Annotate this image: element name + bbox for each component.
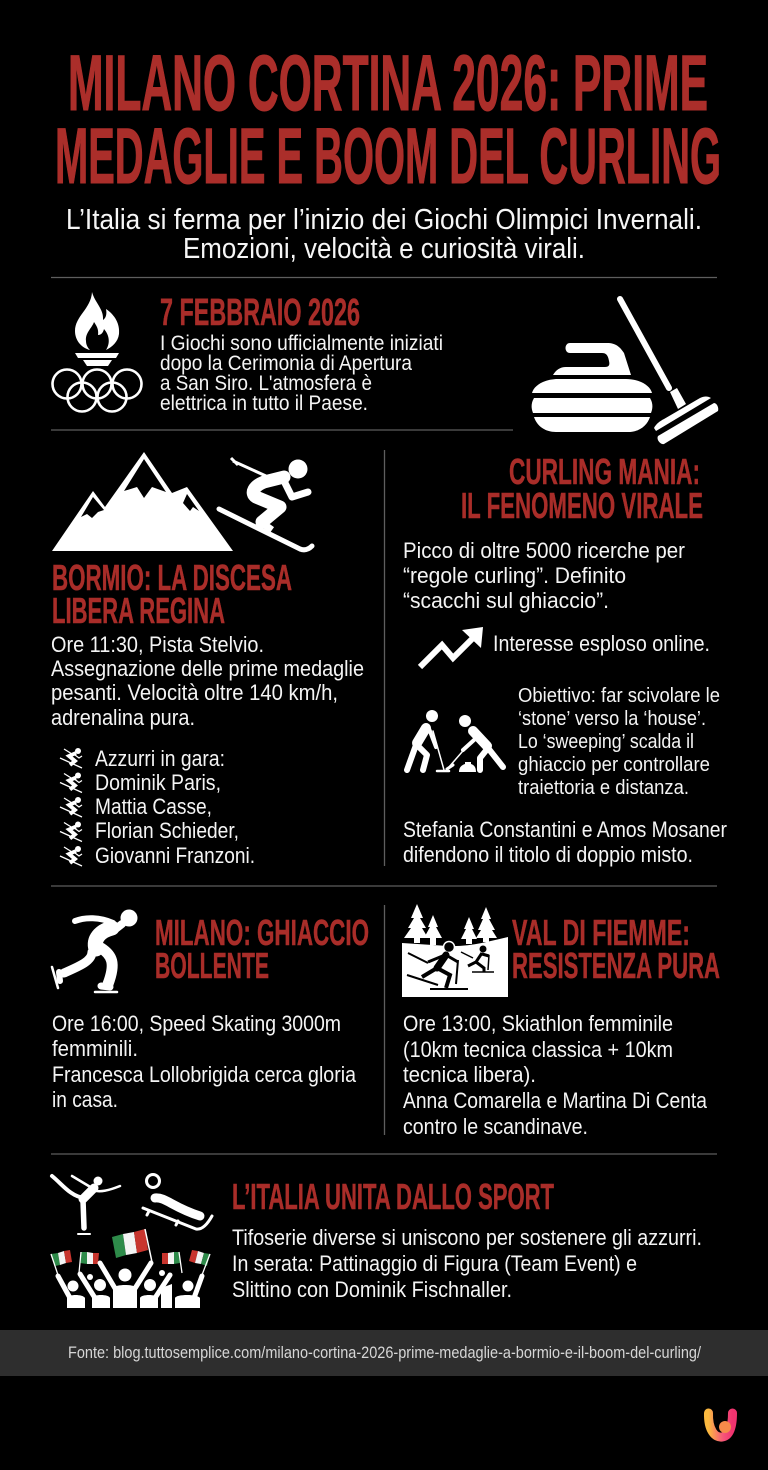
text: opening ceremony: dopo la Cerimonia di Apertura xyxy=(160,352,412,375)
icon: downhill skier xyxy=(219,458,312,550)
icon: cheering crowd with flags xyxy=(51,1229,210,1308)
text: azzurri list: Azzurri in gara: xyxy=(95,746,225,771)
icon: brand logo xyxy=(708,1413,732,1437)
heading: date: 7 FEBBRAIO 2026 xyxy=(160,292,360,334)
panel: milano xyxy=(52,910,369,1112)
icon: figure skater xyxy=(52,1176,120,1234)
text: italia unita details xyxy=(232,1225,702,1302)
icon: cross-country skiers xyxy=(402,904,508,997)
text: online interest: Interesse esploso online. xyxy=(493,631,710,656)
text: italia unita details: In serata: Pattinaggio di Figura (Team Event) e xyxy=(232,1251,637,1276)
subtitle xyxy=(66,204,702,265)
icon: luge xyxy=(143,1174,212,1229)
text: searches: “regole curling”. Definito xyxy=(403,563,626,588)
icon: curling sweepers xyxy=(407,710,503,772)
text: skiathlon details: Anna Comarella e Martina Di Centa xyxy=(403,1088,708,1113)
text: objective: Lo ‘sweeping’ scalda il xyxy=(518,731,694,753)
text: objective xyxy=(518,685,720,799)
text: italia unita details: Tifoserie diverse si uniscono per sostenere gli azzurri. xyxy=(232,1225,702,1250)
icon: people xyxy=(58,1263,202,1308)
text: bormio details xyxy=(51,632,364,730)
text: milano details: Ore 16:00, Speed Skating 3000m xyxy=(52,1011,341,1036)
text: azzurri list: Dominik Paris, xyxy=(95,770,221,795)
text: athletes: difendono il titolo di doppio misto. xyxy=(403,842,693,867)
text: milano details: Francesca Lollobrigida cerca gloria xyxy=(52,1062,357,1087)
panel: val di fiemme xyxy=(402,904,720,1139)
text: azzurri list: Mattia Casse, xyxy=(95,794,212,819)
icon: speed skater xyxy=(52,910,138,992)
title xyxy=(55,38,721,200)
text: milano details: femminili. xyxy=(52,1036,138,1061)
icon: olympic torch and rings xyxy=(52,292,142,412)
panel: curling mania xyxy=(403,451,727,867)
heading: bormio: BORMIO: LA DISCESA xyxy=(52,557,292,598)
panel: bormio xyxy=(51,557,364,868)
heading: milano: BOLLENTE xyxy=(155,945,269,986)
text: athletes: Stefania Constantini e Amos Mosaner xyxy=(403,817,727,842)
icon: mountains xyxy=(52,452,233,551)
heading: val di fiemme xyxy=(512,912,720,986)
text: searches: “scacchi sul ghiaccio”. xyxy=(403,588,609,613)
heading: bormio xyxy=(52,557,292,631)
text: athletes xyxy=(403,817,727,867)
text: italia unita details: Slittino con Dominik Fischnaller. xyxy=(232,1277,512,1302)
text: searches: Picco di oltre 5000 ricerche per xyxy=(403,538,685,563)
text: milano details: in casa. xyxy=(52,1087,118,1112)
icon: rising arrow xyxy=(420,627,483,667)
text: skiathlon details xyxy=(403,1011,708,1139)
icon: curling stone and broom xyxy=(532,299,718,444)
subtitle: L’Italia si ferma per l’inizio dei Giochi Olimpici Invernali. xyxy=(66,204,702,236)
text: skiathlon details: Ore 13:00, Skiathlon femminile xyxy=(403,1011,673,1036)
heading: bormio: LIBERA REGINA xyxy=(52,590,225,631)
subtitle: Emozioni, velocità e curiosità virali. xyxy=(183,233,585,265)
text: bormio details: Assegnazione delle prime medaglie xyxy=(51,656,364,681)
icon: small flags xyxy=(51,1250,210,1275)
text: opening ceremony: I Giochi sono ufficialmente iniziati xyxy=(160,332,443,355)
text: skiathlon details: tecnica libera). xyxy=(403,1062,536,1087)
text: azzurri list: Florian Schieder, xyxy=(95,818,239,843)
text: objective: ‘stone’ verso la ‘house’. xyxy=(518,708,706,730)
text: objective: Obiettivo: far scivolare le xyxy=(518,685,720,707)
text: azzurri list xyxy=(95,746,255,868)
text: objective: ghiaccio per controllare xyxy=(518,754,710,776)
icon: large italian flag xyxy=(112,1229,152,1262)
heading: milano xyxy=(155,912,369,986)
footer source band xyxy=(0,1330,768,1376)
text: objective: traiettoria e distanza. xyxy=(518,777,689,799)
text: skiathlon details: (10km tecnica classica + 10km xyxy=(403,1037,673,1062)
text: bormio details: Ore 11:30, Pista Stelvio. xyxy=(51,632,264,657)
text: opening ceremony xyxy=(160,332,443,415)
text: bormio details: adrenalina pura. xyxy=(51,705,195,730)
text: milano details xyxy=(52,1011,357,1112)
text: opening ceremony: a San Siro. L'atmosfera è xyxy=(160,372,372,395)
icon list: small skiers xyxy=(60,748,82,866)
panel: 7 febbraio xyxy=(160,292,443,415)
text: bormio details: pesanti. Velocità oltre 140 km/h, xyxy=(51,680,338,705)
heading: milano: MILANO: GHIACCIO xyxy=(155,912,369,953)
text: searches xyxy=(403,538,685,613)
heading: italia unita: L’ITALIA UNITA DALLO SPORT xyxy=(232,1176,554,1217)
text: opening ceremony: elettrica in tutto il Paese. xyxy=(160,392,368,415)
heading: curling mania xyxy=(461,451,703,526)
text: azzurri list: Giovanni Franzoni. xyxy=(95,843,255,868)
text: skiathlon details: contro le scandinave. xyxy=(403,1114,588,1139)
panel: italia unita xyxy=(51,1174,702,1308)
